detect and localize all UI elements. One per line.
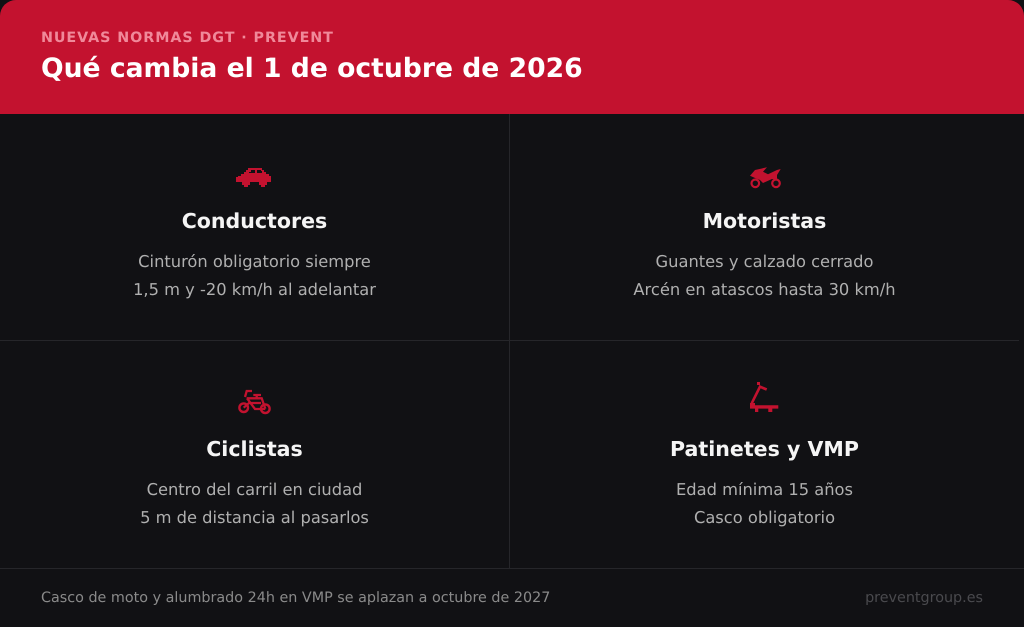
- text: conductores rules: [133, 252, 376, 298]
- text: motoristas rules: Guantes y calzado cerrado: [656, 252, 873, 270]
- main title: Qué cambia el 1 de octubre de 2026: [41, 53, 583, 84]
- heading: motoristas: Motoristas: [703, 209, 826, 233]
- text: patinetes rules: [676, 480, 853, 526]
- heading: patinetes: Patinetes y VMP: [670, 437, 859, 461]
- heading: ciclistas: Ciclistas: [206, 437, 303, 461]
- icon: scooter: [750, 382, 778, 412]
- eyebrow label: NUEVAS NORMAS DGT · PREVENT: [41, 30, 334, 46]
- heading: conductores: Conductores: [182, 209, 327, 233]
- panel: patinetes: [670, 437, 859, 526]
- icon: motorcycle: [750, 167, 781, 188]
- footer note: Casco de moto y alumbrado 24h en VMP se aplazan a octubre de 2027: [41, 590, 550, 606]
- panel: conductores: [133, 209, 376, 298]
- icon: bicycle: [238, 390, 271, 414]
- text: motoristas rules: [633, 252, 896, 298]
- panel: ciclistas: [140, 437, 369, 526]
- text: conductores rules: 1,5 m y -20 km/h al adelantar: [133, 280, 376, 298]
- text: ciclistas rules: Centro del carril en ciudad: [147, 480, 362, 498]
- icon: car: [236, 168, 271, 187]
- text: ciclistas rules: 5 m de distancia al pasarlos: [140, 508, 369, 526]
- text: ciclistas rules: [140, 480, 369, 526]
- text: conductores rules: Cinturón obligatorio siempre: [138, 252, 371, 270]
- text: patinetes rules: Casco obligatorio: [694, 508, 835, 526]
- header banner: [0, 0, 1024, 114]
- footer site: preventgroup.es: [865, 590, 983, 606]
- panel: motoristas: [633, 209, 896, 298]
- text: patinetes rules: Edad mínima 15 años: [676, 480, 853, 498]
- text: motoristas rules: Arcén en atascos hasta 30 km/h: [633, 280, 896, 298]
